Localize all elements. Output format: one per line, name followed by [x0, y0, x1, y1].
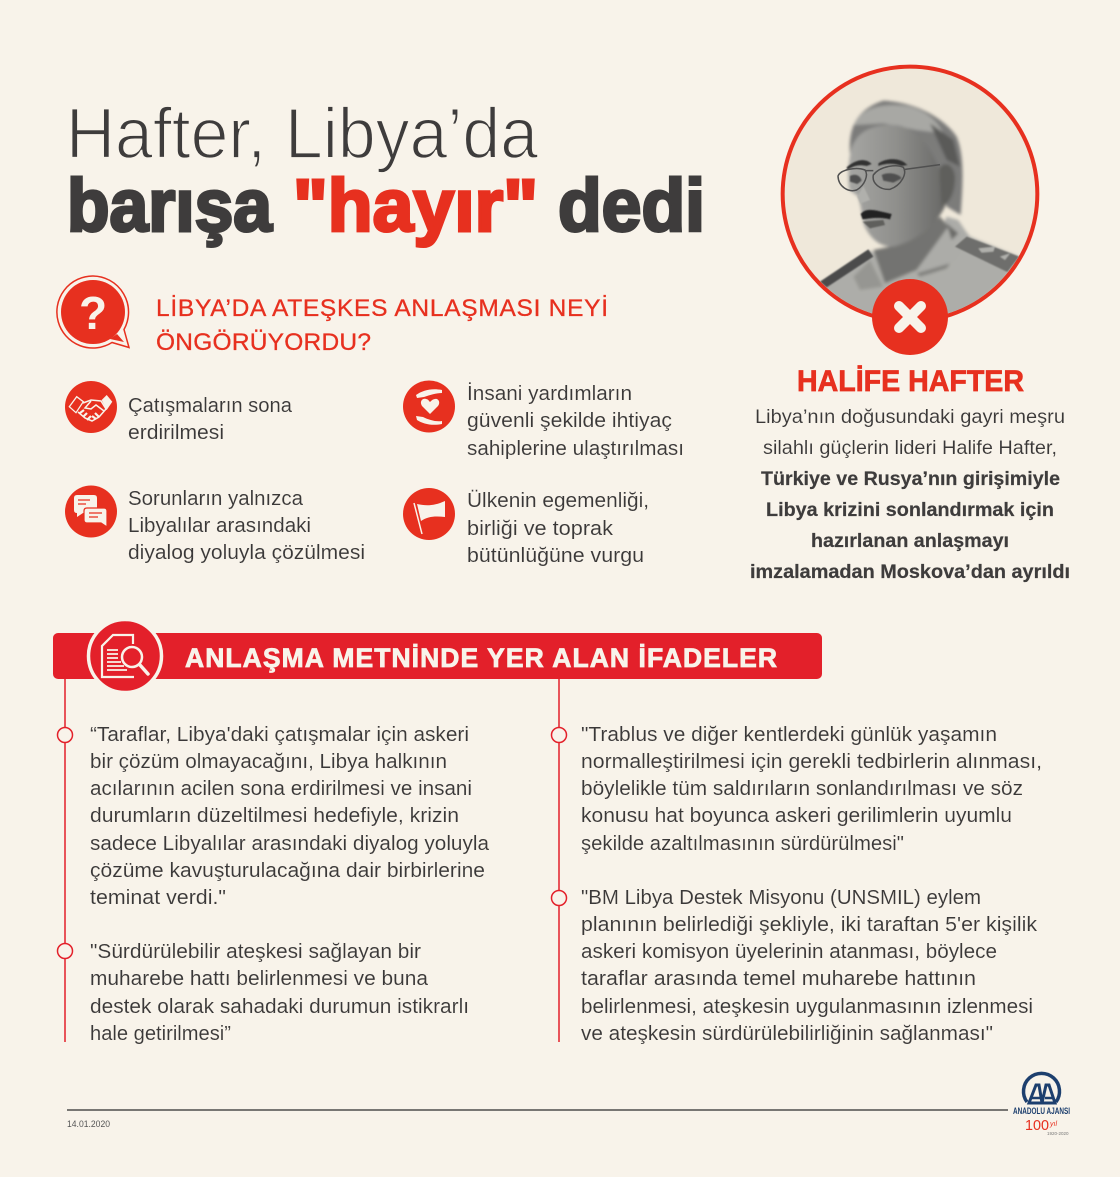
portrait of Halife Hafter: [783, 67, 1037, 323]
profile: Halife Hafter: imzalamadan Moskova’dan ayrıldı: [750, 561, 1070, 583]
glasses: [838, 165, 940, 191]
icon: speech bubbles: [65, 486, 117, 538]
quote: right column second: [581, 886, 1038, 1045]
quote: left column first: teminat verdi.": [90, 886, 226, 909]
profile: Halife Hafter: Libya krizini sonlandırmak için: [766, 499, 1054, 521]
item: sovereignty: [403, 488, 649, 567]
quote: left column second: [90, 940, 469, 1045]
banner: agreement text: ANLAŞMA METNİNDE YER ALAN İFADELER: [185, 643, 777, 673]
subheading: ceasefire question: LİBYA’DA ATEŞKES ANLAŞMASI NEYİ: [156, 295, 608, 322]
item: end of clashes: erdirilmesi: [128, 421, 224, 444]
timeline lines: [65, 679, 559, 1042]
quote: left column first: “Taraflar, Libya'daki çatışmalar için askeri: [90, 723, 469, 746]
item: end of clashes: [65, 381, 293, 444]
quote: left column first: bir çözüm olmayacağını, Libya halkının: [90, 750, 447, 773]
quote: left column first: çözüme kavuşturulacağına dair birbirlerine: [90, 859, 485, 882]
title: "hayır": [293, 164, 538, 247]
logo: Anadolu Ajansı: [1013, 1073, 1070, 1136]
footer rule: [67, 1109, 1008, 1111]
quote: right column second: belirlenmesi, ateşkesin uygulanmasının izlenmesi: [581, 995, 1033, 1018]
icon: question bubble: [57, 276, 129, 348]
icon: handshake: [65, 381, 117, 433]
title: Hafter, Libya’da: [66, 95, 538, 174]
title: dedi: [558, 164, 705, 247]
icon: hands and heart: [403, 380, 455, 432]
timeline markers: [58, 728, 566, 958]
title: [66, 95, 705, 247]
quote: right column second: taraflar arasında temel muharebe hattının: [581, 967, 976, 990]
quote: right column second: askeri komisyon üyelerinin atanması, böylece: [581, 940, 997, 963]
quote: right column first: "Trablus ve diğer kentlerdeki günlük yaşamın: [581, 723, 997, 746]
quote: right column second: planının belirlediği şekliyle, iki taraftan 5'er kişilik: [581, 913, 1038, 936]
profile: Halife Hafter: [750, 365, 1070, 583]
quote: left column second: muharebe hattı belirlenmesi ve buna: [90, 967, 429, 990]
item: dialogue: diyalog yoluyla çözülmesi: [128, 541, 365, 564]
quote: right column first: şekilde azaltılmasının sürdürülmesi": [581, 832, 904, 855]
profile: Halife Hafter: Libya’nın doğusundaki gayri meşru: [755, 406, 1065, 428]
quote: left column second: "Sürdürülebilir ateşkesi sağlayan bir: [90, 940, 421, 963]
quote: left column first: [90, 723, 490, 909]
logo: Anadolu Ajansı: ANADOLU AJANSI: [1013, 1106, 1070, 1116]
quote: right column first: konusu hat boyunca askeri gerilimlerin uyumlu: [581, 804, 1012, 827]
subheading: ceasefire question: [57, 276, 608, 356]
quote: left column first: sadece Libyalılar arasındaki diyalog yoluyla: [90, 832, 490, 855]
profile: Halife Hafter: silahlı güçlerin lideri Halife Hafter,: [763, 437, 1057, 459]
quote: left column second: destek olarak sahadaki durumun istikrarlı: [90, 995, 469, 1018]
icon: red cross badge: [872, 279, 948, 355]
logo: Anadolu Ajansı: 1920-2020: [1047, 1131, 1069, 1136]
icon: flag: [403, 488, 455, 540]
item: sovereignty: bütünlüğüne vurgu: [467, 544, 644, 567]
icon: document and magnifier: [88, 620, 162, 692]
item: dialogue: Sorunların yalnızca: [128, 487, 304, 510]
title: barışa: [67, 164, 273, 247]
quote: right column second: ve ateşkesin sürdürülebilirliğinin sağlanması": [581, 1022, 993, 1045]
item: humanitarian aid: [403, 380, 684, 460]
banner: agreement text: [53, 620, 822, 692]
logo: Anadolu Ajansı: 100: [1025, 1117, 1049, 1134]
item: humanitarian aid: İnsani yardımların: [467, 382, 632, 405]
item: humanitarian aid: sahiplerine ulaştırılması: [467, 437, 684, 460]
item: sovereignty: Ülkenin egemenliği,: [467, 489, 649, 512]
profile: Halife Hafter: hazırlanan anlaşmayı: [811, 530, 1009, 552]
profile: Halife Hafter: Türkiye ve Rusya’nın girişimiyle: [761, 468, 1060, 490]
quote: left column first: durumların düzeltilmesi hedefiyle, krizin: [90, 804, 459, 827]
quote: right column second: "BM Libya Destek Misyonu (UNSMIL) eylem: [581, 886, 981, 909]
logo: Anadolu Ajansı: yıl: [1049, 1121, 1057, 1128]
epaulettes: [820, 237, 1019, 287]
quote: left column first: acılarının acilen sona erdirilmesi ve insani: [90, 777, 472, 800]
subheading: ceasefire question: ÖNGÖRÜYORDU?: [156, 329, 371, 356]
icon: question bubble: ?: [79, 287, 107, 339]
quote: right column first: böylelikle tüm saldırıların sonlandırılması ve söz: [581, 777, 1023, 800]
item: dialogue: [65, 486, 365, 564]
item: dialogue: Libyalılar arasındaki: [128, 514, 311, 537]
item: humanitarian aid: güvenli şekilde ihtiyaç: [467, 409, 672, 432]
quote: left column second: hale getirilmesi”: [90, 1022, 231, 1045]
date: 14.01.2020: [67, 1119, 110, 1130]
item: sovereignty: birliği ve toprak: [467, 517, 614, 540]
item: end of clashes: Çatışmaların sona: [128, 394, 293, 417]
quote: right column first: [581, 723, 1042, 855]
profile: Halife Hafter: HALİFE HAFTER: [797, 365, 1024, 398]
quote: right column first: normalleştirilmesi için gerekli tedbirlerin alınması,: [581, 750, 1042, 773]
